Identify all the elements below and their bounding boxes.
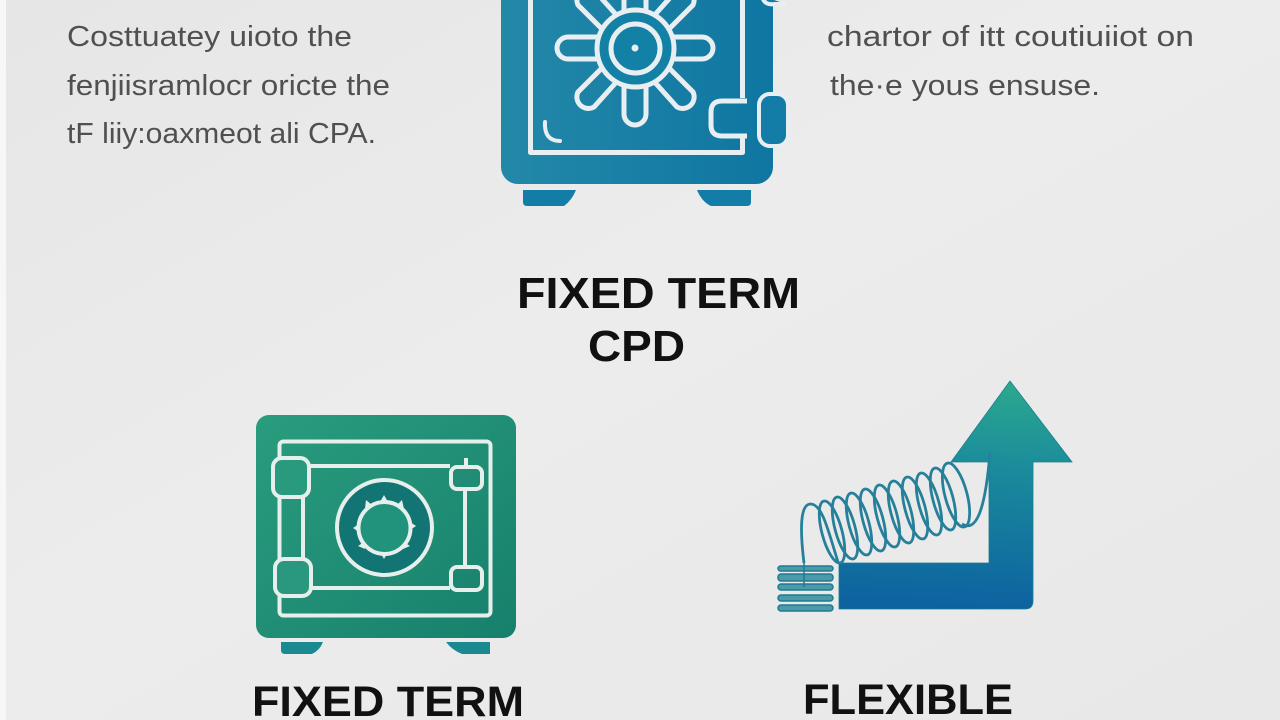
text block: left description: [67, 21, 390, 150]
icon: green safe: [256, 415, 516, 654]
icon: flexible spring arrow: [778, 381, 1072, 611]
text block: left description: tF liiy:oaxmeot ali CPA.: [67, 118, 376, 150]
icon: blue safe: [501, 0, 788, 206]
text block: left description: Costtuatey uioto the: [67, 21, 352, 53]
text block: left description: fenjiisramlocr oricte the: [67, 70, 390, 102]
heading: fixed term cpd: [517, 269, 800, 371]
text block: right description: [827, 21, 1194, 102]
text block: right description: chartor of itt coutiuiiot on: [827, 21, 1194, 53]
text block: right description: the·e yous ensuse.: [830, 70, 1100, 102]
heading: fixed term cpd: FIXED TERM: [517, 269, 800, 318]
heading: fixed term cpd: CPD: [588, 322, 685, 371]
